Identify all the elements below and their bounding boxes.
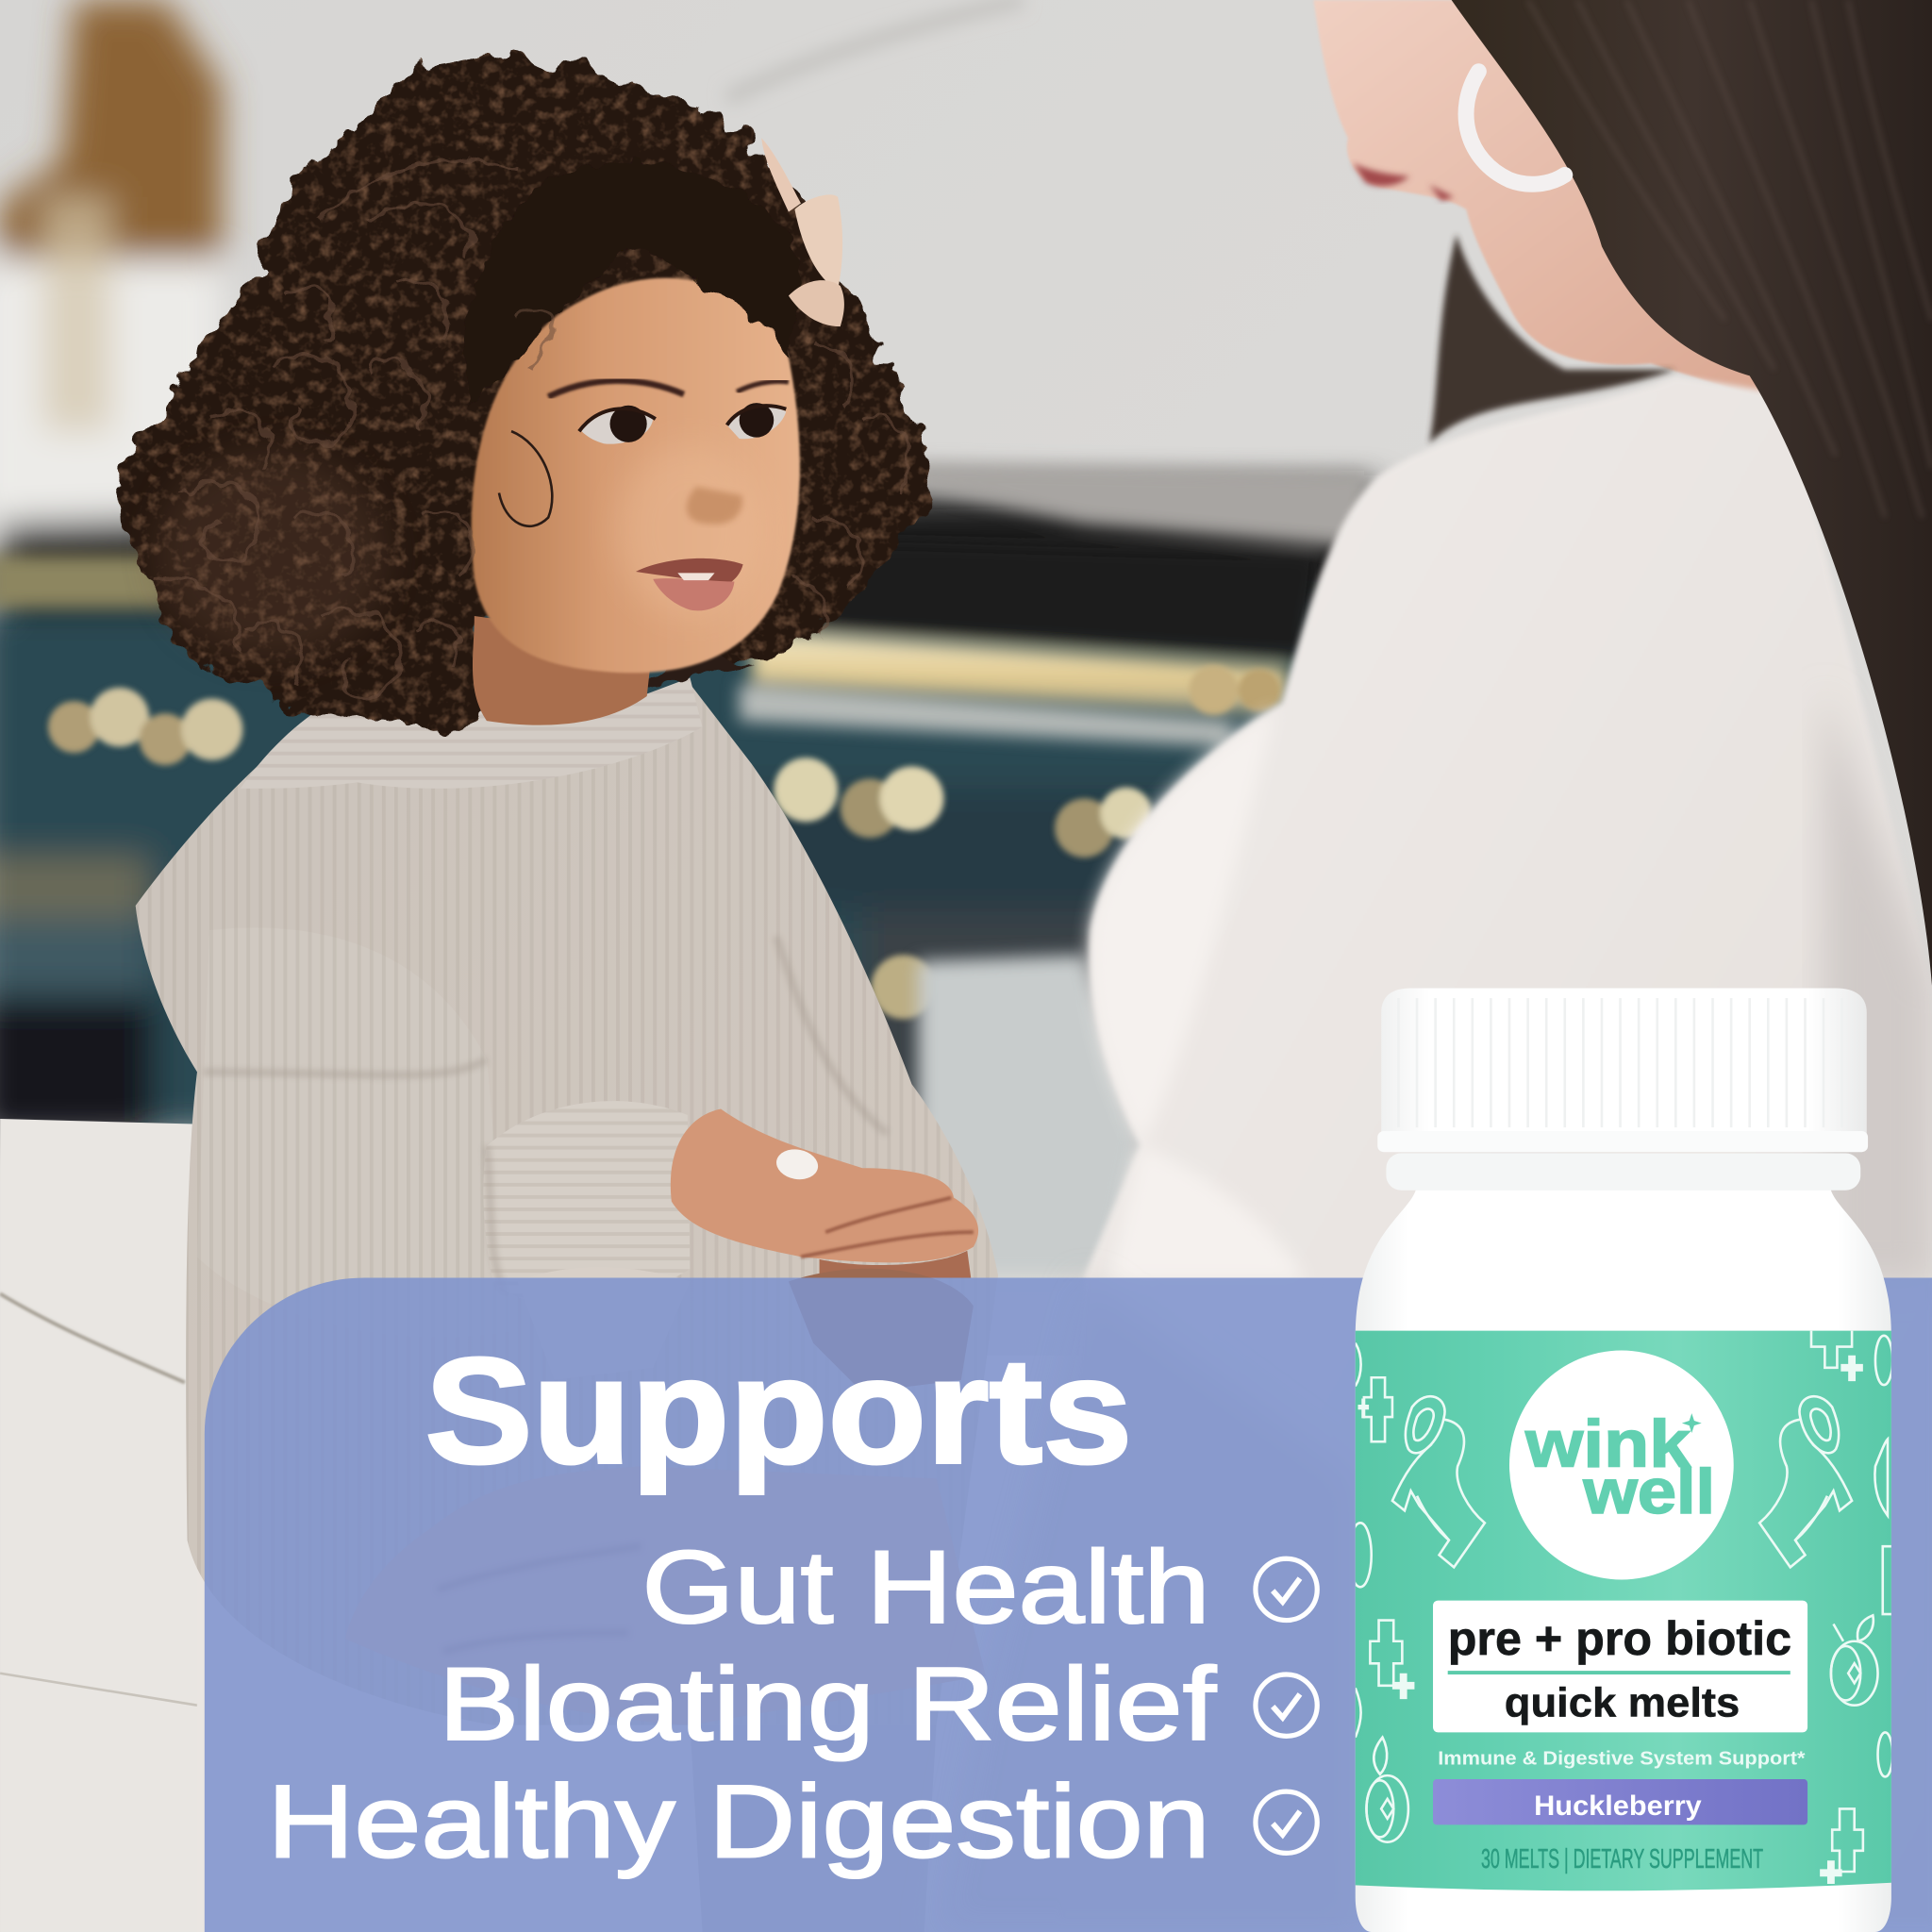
mother's lips xyxy=(1353,162,1454,201)
small filled plus marks xyxy=(1357,1356,1863,1884)
mother's hair xyxy=(1452,0,1932,986)
right fruit icon xyxy=(1831,1615,1878,1706)
grey back rail xyxy=(912,462,1368,548)
stray curl by cheek xyxy=(499,431,552,526)
logo text xyxy=(1524,1406,1715,1527)
benefit: Healthy Digestion: Healthy Digestion xyxy=(267,1764,1210,1879)
edge icons xyxy=(1355,1522,1373,1589)
knobs xyxy=(48,665,1280,1019)
right brow xyxy=(737,381,789,391)
cuff xyxy=(483,1101,690,1307)
cutting board xyxy=(0,0,222,258)
label line art xyxy=(1349,1328,1895,1872)
earring xyxy=(1466,72,1565,184)
mother's sweater xyxy=(1059,375,1932,1923)
nose xyxy=(687,487,742,525)
oven window xyxy=(0,998,154,1140)
lower oven block xyxy=(862,912,1158,1134)
upper brass rail right xyxy=(752,631,1288,715)
child's hair back xyxy=(125,56,930,732)
hair strands xyxy=(1528,0,1932,518)
bottle body xyxy=(1356,1185,1891,1932)
marble counter xyxy=(0,1119,370,1932)
label xyxy=(1356,1331,1891,1890)
child's face xyxy=(472,278,800,673)
towel xyxy=(918,955,1140,1275)
child xyxy=(125,56,998,1725)
product name box: pre + pro biotic xyxy=(1448,1612,1791,1665)
upper brass rail left xyxy=(0,555,173,608)
left person icon xyxy=(1392,1396,1485,1567)
child's neck xyxy=(473,616,653,725)
tagline: Immune & Digestive System Support* xyxy=(1438,1748,1806,1769)
left eye xyxy=(579,406,656,444)
logo text: wink xyxy=(1524,1406,1691,1480)
flavor bar xyxy=(1433,1779,1807,1824)
marble vein on wall xyxy=(727,0,1023,98)
cap xyxy=(1377,989,1868,1152)
white shelf xyxy=(0,261,222,526)
count text: 30 MELTS | DIETARY SUPPLEMENT xyxy=(1481,1844,1763,1874)
mouth xyxy=(636,558,743,610)
panel: supports benefits xyxy=(205,1277,1932,1932)
product name box xyxy=(1433,1601,1807,1732)
cheek glow xyxy=(616,443,764,616)
left fruit icon xyxy=(1366,1738,1408,1842)
marble lower right xyxy=(197,1356,1429,1932)
flavor bar: Huckleberry xyxy=(1534,1790,1702,1822)
sleeve xyxy=(197,927,518,1338)
hair wisp by collar xyxy=(635,647,752,696)
curls xyxy=(160,160,909,699)
heading: Supports: Supports xyxy=(425,1326,1132,1494)
hair warm glow xyxy=(154,450,388,659)
right eye xyxy=(727,403,786,439)
benefit: Gut Health: Gut Health xyxy=(641,1530,1210,1645)
mother xyxy=(1059,0,1932,1923)
child's hand with pill xyxy=(671,1109,978,1277)
mother's face xyxy=(1313,0,1848,407)
hob dark band xyxy=(789,542,1319,659)
sweater fold shadow xyxy=(204,937,887,1293)
benefit: Bloating Relief: Bloating Relief xyxy=(439,1647,1217,1762)
sweater shade xyxy=(1824,690,1932,1281)
sweater lit bulge xyxy=(1090,708,1306,1281)
right person icon xyxy=(1759,1396,1852,1567)
mother's hand behind panel xyxy=(345,1267,1356,1932)
product bottle xyxy=(1349,989,1895,1932)
hair under chin xyxy=(1429,234,1675,443)
product name box: quick melts xyxy=(1505,1680,1740,1725)
fringe xyxy=(465,162,800,407)
stove top dark xyxy=(0,487,1380,665)
logo circle xyxy=(1509,1351,1734,1579)
neck ring xyxy=(1386,1154,1860,1191)
hood collar xyxy=(241,677,702,789)
child's sweater body xyxy=(136,677,998,1725)
stove front xyxy=(0,610,1331,1134)
lower hand xyxy=(820,1251,971,1277)
stove shadow band xyxy=(690,789,1208,912)
plus icons xyxy=(1364,1377,1392,1441)
lower rail xyxy=(0,857,148,918)
pill xyxy=(774,1146,821,1183)
hair bow xyxy=(761,138,844,326)
left brow xyxy=(548,381,684,397)
vase highlight xyxy=(43,197,111,431)
panel background xyxy=(205,1277,1932,1932)
logo text: well xyxy=(1582,1457,1715,1527)
